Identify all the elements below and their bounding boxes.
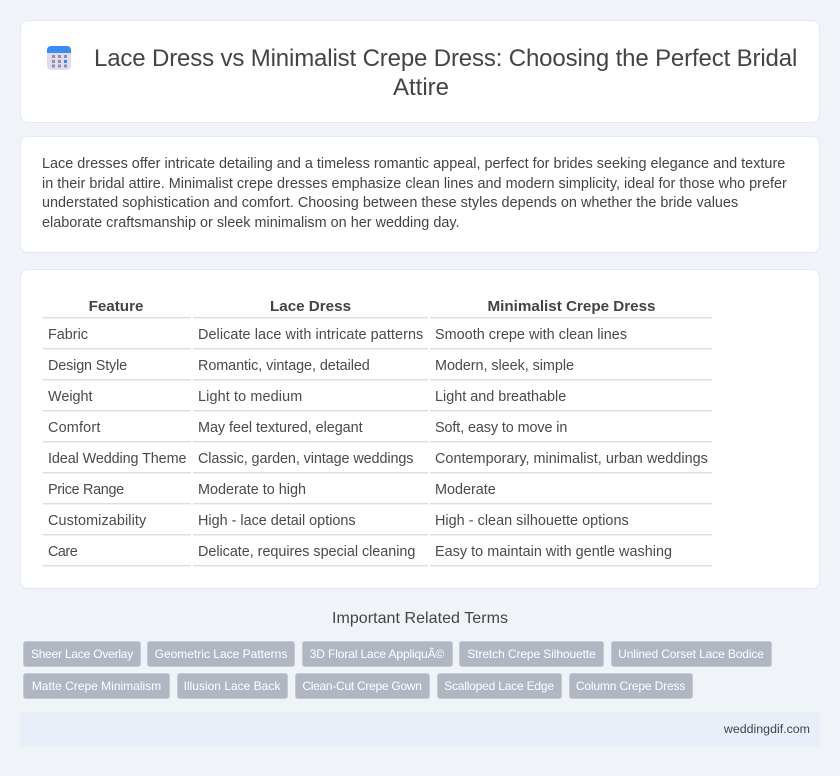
row: Ideal Wedding Theme: Classic, garden, vintage weddings <box>198 451 413 467</box>
row: Ideal Wedding Theme: Contemporary, minimalist, urban weddings <box>435 451 708 467</box>
row: Customizability: High - clean silhouette options <box>435 513 629 529</box>
tag <box>459 641 604 667</box>
title: Attire <box>393 74 449 101</box>
tag <box>147 641 295 667</box>
row: Ideal Wedding Theme <box>48 451 708 467</box>
row: Design Style: Modern, sleek, simple <box>435 358 574 374</box>
tag <box>23 641 141 667</box>
panel: comparison table <box>20 269 820 589</box>
header row: Feature <box>89 298 143 315</box>
row: Customizability <box>48 513 629 529</box>
tag: Geometric Lace Patterns <box>155 647 287 661</box>
tag: Scalloped Lace Edge <box>444 679 554 693</box>
row: Price Range: Moderate <box>435 482 496 498</box>
row: Customizability: Customizability <box>48 513 146 529</box>
intro text <box>42 156 787 230</box>
row: Ideal Wedding Theme: Ideal Wedding Theme <box>48 451 186 467</box>
tag <box>610 641 772 667</box>
tag <box>568 673 692 699</box>
tag <box>436 673 562 699</box>
footer source text: weddingdif.com <box>724 722 810 736</box>
header row: Lace Dress <box>270 298 351 315</box>
title: Lace Dress vs Minimalist Crepe Dress: Choosing the Perfect Bridal <box>94 45 797 72</box>
row: Price Range <box>48 482 496 498</box>
footer bar <box>20 712 820 746</box>
row: Fabric: Fabric <box>48 327 88 343</box>
row: Price Range: Price Range <box>48 482 124 498</box>
tag <box>23 673 170 699</box>
row: Design Style: Design Style <box>48 358 127 374</box>
comparison table <box>43 298 712 567</box>
row: Design Style <box>48 358 574 374</box>
intro text: elaborate craftsmanship or sleek minimalism on her wedding day. <box>42 214 460 230</box>
row: Price Range: Moderate to high <box>198 482 306 498</box>
tag: Stretch Crepe Silhouette <box>467 647 596 661</box>
tag: 3D Floral Lace AppliquÃ© <box>310 647 444 661</box>
row: Comfort: Comfort <box>48 420 101 436</box>
row: Care: Care <box>48 544 77 560</box>
related term tags <box>23 641 772 699</box>
tag <box>176 673 288 699</box>
row: Design Style: Romantic, vintage, detailed <box>198 358 370 374</box>
row: Comfort: Soft, easy to move in <box>435 420 567 436</box>
intro text: in their bridal attire. Minimalist crepe dresses emphasize clean lines and modern simplicity, ideal for those who prefer <box>42 176 787 192</box>
row: Comfort: May feel textured, elegant <box>198 420 363 436</box>
row: Care: Delicate, requires special cleaning <box>198 544 415 560</box>
row: Fabric: Delicate lace with intricate patterns <box>198 327 423 343</box>
tag: Clean-Cut Crepe Gown <box>302 679 422 693</box>
row: Fabric: Smooth crepe with clean lines <box>435 327 627 343</box>
icon: calendar <box>47 46 71 70</box>
row: Care <box>48 544 672 560</box>
row: Care: Easy to maintain with gentle washing <box>435 544 672 560</box>
tag: Column Crepe Dress <box>576 679 685 693</box>
tag: Matte Crepe Minimalism <box>32 679 161 693</box>
row: Weight <box>48 389 566 405</box>
intro text: Lace dresses offer intricate detailing and a timeless romantic appeal, perfect for brides seeking elegance and texture <box>42 156 785 172</box>
tag: Sheer Lace Overlay <box>31 647 133 661</box>
heading: related terms: Important Related Terms <box>332 610 508 627</box>
tag <box>294 673 430 699</box>
row: Customizability: High - lace detail options <box>198 513 356 529</box>
header row <box>89 298 655 315</box>
intro text: understated sophistication and comfort. Choosing between these styles depends on whether the bride values <box>42 195 738 211</box>
tag: Illusion Lace Back <box>184 679 280 693</box>
panel: title header <box>20 20 820 123</box>
tag: Unlined Corset Lace Bodice <box>618 647 764 661</box>
panel: introduction <box>20 136 820 253</box>
header row: Minimalist Crepe Dress <box>488 298 655 315</box>
title <box>94 45 797 101</box>
row: Comfort <box>48 420 567 436</box>
row: Fabric <box>48 327 627 343</box>
row: Weight: Weight <box>48 389 93 405</box>
tag <box>302 641 452 667</box>
row: Weight: Light to medium <box>198 389 302 405</box>
row: Weight: Light and breathable <box>435 389 566 405</box>
